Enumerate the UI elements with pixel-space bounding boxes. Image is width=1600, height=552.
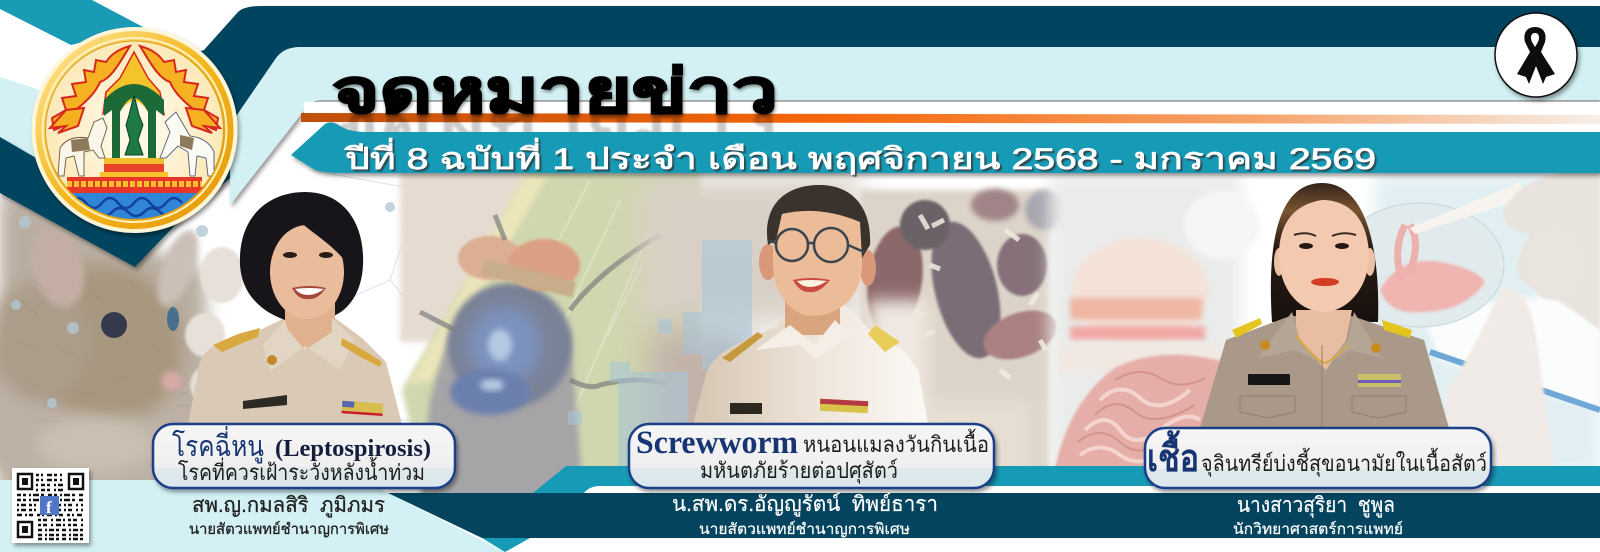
shape: white stripe under title band — [304, 102, 1600, 131]
logo ring — [32, 27, 238, 233]
icon: facebook: f — [46, 498, 52, 517]
speaker 3 credit: นางสาวสุริยา ชูพูล — [1237, 494, 1395, 518]
card heading — [172, 426, 431, 464]
speaker 1 credit — [189, 494, 389, 538]
shape: orange rule — [301, 113, 1600, 124]
person 1 portrait — [188, 192, 402, 424]
card heading: (Leptospirosis) — [275, 436, 431, 462]
photo: petri dishes and minced meat — [1050, 174, 1260, 474]
photo: white pellets and network — [11, 170, 412, 420]
bottom band: pale cyan panel — [0, 480, 505, 552]
card subheading: มหันตภัยร้ายต่อปศุสัตว์ — [700, 458, 898, 484]
photo: grey blur with translucent squares — [568, 175, 860, 480]
card heading: Screwworm — [636, 425, 798, 461]
logo: provincial seal — [32, 27, 238, 233]
card subheading: โรคที่ควรเฝ้าระวังหลังน้ำท่วม — [178, 457, 425, 485]
title reflection: จดหมายข่าว — [332, 101, 778, 168]
speaker 1 credit: สพ.ญ.กมลสิริ ภูมิภมร — [192, 494, 385, 518]
shape: left light band — [0, 77, 40, 160]
person 2 portrait — [693, 185, 928, 424]
photo: gloved hands with tweezers and meat dish — [1364, 173, 1600, 466]
card: leptospirosis — [153, 424, 455, 488]
photo: rat — [0, 190, 215, 505]
card heading: โรคฉี่หนู — [172, 426, 264, 464]
bottom band: teal strip — [533, 466, 1600, 493]
logo red band — [67, 177, 202, 193]
icon: black ribbon — [1517, 27, 1555, 84]
card: screwworm — [629, 424, 994, 488]
card: microbes — [1145, 428, 1491, 488]
shape: top-left teal corner band — [0, 0, 143, 45]
title — [332, 58, 778, 168]
logo bull — [58, 118, 107, 176]
logo shrine — [103, 52, 164, 158]
logo flame scrolls — [50, 46, 220, 133]
card heading — [1147, 430, 1487, 480]
logo blue waves — [72, 193, 198, 219]
speaker 3 credit — [1233, 494, 1403, 538]
bottom band: white stripe — [584, 486, 1600, 493]
shape: navy chevron behind logo — [0, 6, 1600, 267]
card heading: หนอนแมลงวันกินเนื้อ — [803, 429, 989, 457]
speaker 1 credit: นายสัตวแพทย์ชำนาญการพิเศษ — [189, 521, 389, 538]
speaker 3 credit: นักวิทยาศาสตร์การแพทย์ — [1233, 521, 1403, 538]
bottom band: teal notch — [482, 538, 530, 552]
speaker 2 credit: นายสัตวแพทย์ชำนาญการพิเศษ — [699, 521, 910, 538]
logo pedestal — [100, 158, 168, 177]
logo horse — [160, 112, 214, 176]
card heading — [636, 425, 989, 461]
subtitle ribbon — [291, 122, 1600, 176]
shape: pale cyan title band — [230, 47, 1600, 205]
speaker 2 credit — [672, 492, 938, 538]
logo saddle — [71, 135, 194, 152]
icon: mourning ribbon badge — [1495, 13, 1577, 97]
speaker 2 credit: น.สพ.ดร.อัญญูรัตน์ ทิพย์ธารา — [672, 492, 938, 517]
bottom band: navy bar — [388, 493, 1600, 538]
QR code with facebook mark — [12, 468, 89, 543]
subtitle text: ปีที่ 8 ฉบับที่ 1 ประจำ เดือน พฤศจิกายน 2568 - มกราคม 2569 — [344, 138, 1376, 176]
logo emblem — [40, 46, 230, 223]
photo: blow fly on leaf — [400, 172, 700, 500]
background photo collage — [0, 170, 1600, 505]
card heading: เชื้อ — [1147, 430, 1199, 480]
title text: จดหมายข่าว — [332, 58, 778, 125]
person 3 portrait — [1200, 183, 1449, 428]
photo: larvae on grains — [860, 189, 1065, 480]
card heading: จุลินทรีย์บ่งชี้สุขอนามัยในเนื้อสัตว์ — [1201, 448, 1487, 477]
